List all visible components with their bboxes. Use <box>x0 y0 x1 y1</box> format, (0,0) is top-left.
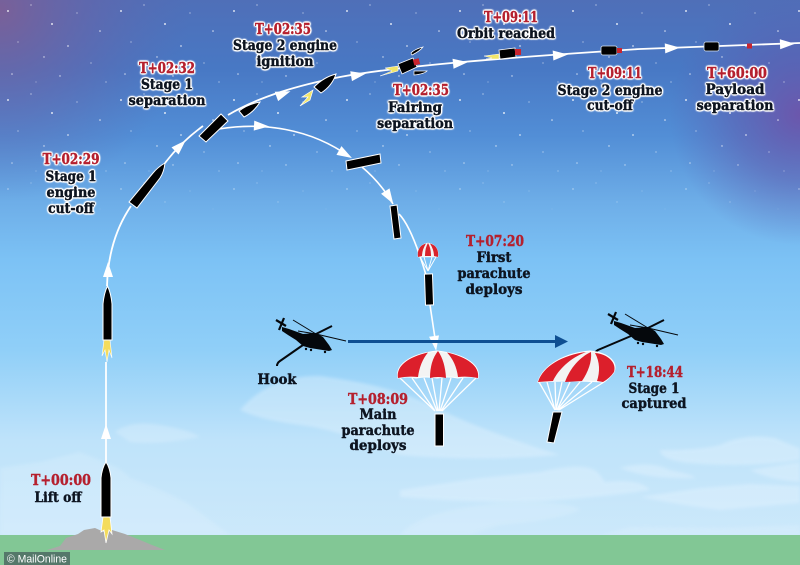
label: stage 1 engine cut-off <box>42 150 100 217</box>
clouds <box>0 376 800 535</box>
label: stage 2 engine cut-off: cut-off <box>587 98 634 114</box>
stage 2 separated <box>239 102 260 117</box>
label: stage 2 engine ignition <box>233 20 337 70</box>
rocket: lift off <box>101 462 112 543</box>
label: stage 2 engine ignition: ignition <box>256 54 314 70</box>
label: orbit reached: T+09:11 <box>484 8 538 26</box>
rocket: stage 1 engine cut-off <box>129 163 165 208</box>
label: stage 1 separation: T+02:32 <box>139 59 195 77</box>
label: stage 1 separation: Stage 1 <box>141 77 193 93</box>
label: first parachute deploys: deploys <box>466 282 523 298</box>
orbit reached stage <box>484 48 521 59</box>
label: stage 1 captured <box>622 363 687 412</box>
booster under small parachute <box>424 274 434 305</box>
label: main parachute deploys <box>342 390 415 454</box>
label: main parachute deploys: Main <box>360 407 396 423</box>
label: fairing separation: Fairing <box>388 100 442 116</box>
helicopter: hook <box>276 318 346 366</box>
label: stage 1 captured: captured <box>622 396 687 412</box>
returning booster horizontal <box>346 154 381 170</box>
label: stage 1 engine cut-off: Stage 1 <box>46 169 96 185</box>
smoke cloud <box>47 528 165 550</box>
label: first parachute deploys: First <box>476 250 512 266</box>
label: main parachute deploys: parachute <box>342 423 415 439</box>
label: payload separation: separation <box>696 98 774 114</box>
small parachute <box>418 243 438 271</box>
label: main parachute deploys: deploys <box>350 438 407 454</box>
label: lift off <box>31 471 91 506</box>
label: orbit reached <box>457 8 555 42</box>
helicopter: capture <box>594 312 678 354</box>
label: lift off: T+00:00 <box>31 471 91 489</box>
label: stage 2 engine cut-off: Stage 2 engine <box>558 83 663 99</box>
fairing separation <box>380 47 427 76</box>
label: lift off: Lift off <box>34 490 83 506</box>
label: first parachute deploys <box>458 232 531 298</box>
label: payload separation: T+60:00 <box>707 64 767 82</box>
label: payload separation: Payload <box>706 82 765 98</box>
rocket: ascent <box>102 286 112 362</box>
label: stage 1 separation <box>128 59 206 109</box>
label: stage 2 engine cut-off: T+09:11 <box>588 64 642 82</box>
label: fairing separation: separation <box>377 116 453 132</box>
label: stage 1 captured: Stage 1 <box>628 381 680 397</box>
label: orbit reached: Orbit reached <box>457 26 555 42</box>
label: fairing separation <box>377 81 453 132</box>
helicopter flight path arrow <box>348 335 568 348</box>
return trajectory <box>219 126 436 345</box>
payload separation <box>704 42 752 51</box>
label: stage 1 engine cut-off: engine <box>46 185 96 201</box>
label: fairing separation: T+02:35 <box>393 81 449 99</box>
label: first parachute deploys: T+07:20 <box>466 232 524 250</box>
returning booster falling <box>390 205 401 239</box>
label: stage 1 separation: separation <box>128 93 206 109</box>
label: main parachute deploys: T+08:09 <box>348 390 408 408</box>
label: stage 2 engine cut-off <box>558 64 663 114</box>
capture parachute <box>538 351 615 443</box>
stage 1 separated <box>199 114 228 142</box>
label: stage 1 engine cut-off: cut-off <box>48 201 95 217</box>
trajectory arrows <box>101 39 795 439</box>
label: stage 1 engine cut-off: T+02:29 <box>42 150 100 168</box>
label: stage 2 engine ignition: T+02:35 <box>255 20 311 38</box>
label: stage 2 engine ignition: Stage 2 engine <box>233 38 337 54</box>
label: stage 1 captured: T+18:44 <box>627 363 683 381</box>
label: first parachute deploys: parachute <box>458 266 531 282</box>
ascent trajectory <box>106 43 800 462</box>
main parachute <box>398 351 478 446</box>
label: payload separation <box>696 64 774 114</box>
stage 2 ignition <box>300 74 336 106</box>
ground <box>0 535 800 565</box>
stage 2 cut-off <box>601 46 622 55</box>
label: hook: Hook <box>258 372 297 388</box>
